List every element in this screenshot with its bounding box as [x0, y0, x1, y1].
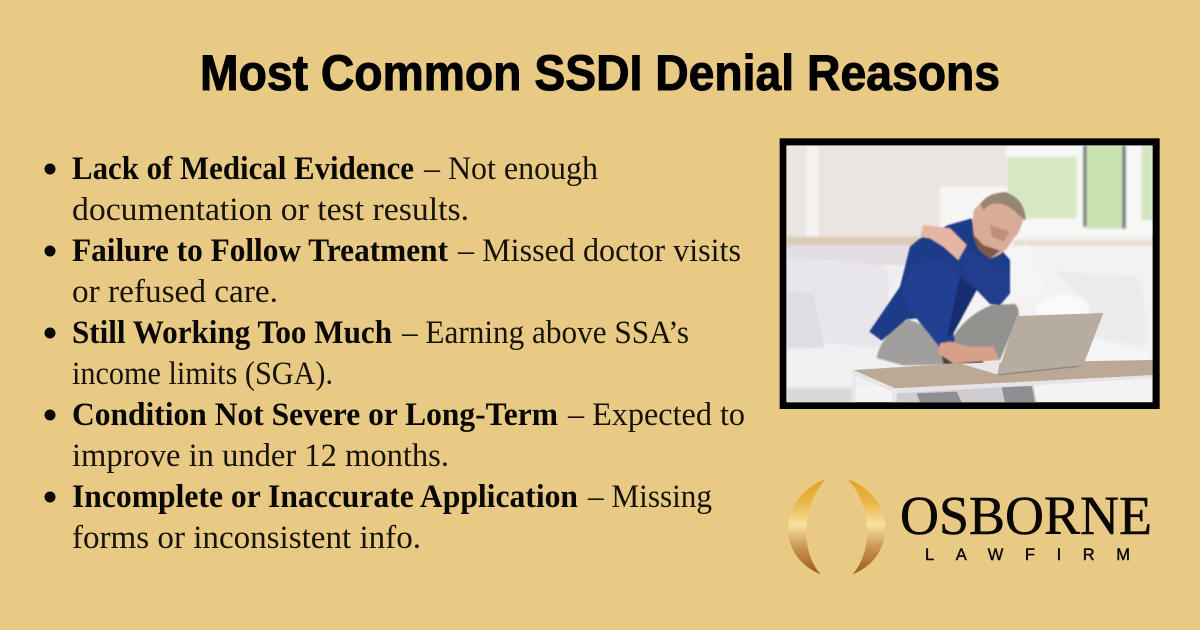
reason 3: still working too much: [44, 315, 689, 392]
photo frame: [780, 138, 1160, 409]
laptop: [997, 313, 1103, 374]
sofa: [1017, 246, 1153, 359]
list of denial reasons: [44, 151, 745, 556]
reason 5: incomplete or inaccurate application: Incomplete or Inaccurate Application: [72, 479, 578, 515]
hand on keyboard: [938, 342, 999, 363]
title: Most Common SSDI Denial Reasons: [200, 45, 1000, 101]
reason 2: failure to follow treatment: Failure to Follow Treatment: [72, 233, 448, 269]
shirt: [869, 218, 1010, 350]
reason 4: condition not severe or long-term: – Expected to: [567, 397, 745, 433]
reason 2: failure to follow treatment: – Missed doctor visits: [457, 233, 741, 269]
trousers: [877, 319, 950, 365]
reason 2: failure to follow treatment: or refused care.: [72, 274, 278, 310]
photo: man with shoulder pain at laptop: [780, 138, 1160, 409]
reason 4: condition not severe or long-term: [44, 397, 745, 474]
reason 1: lack of medical evidence: – Not enough: [423, 151, 598, 187]
reason 1: lack of medical evidence: documentation or test results.: [72, 192, 469, 228]
logo wordmark: OSBORNE: [900, 485, 1152, 546]
window: [1007, 145, 1153, 235]
reason 1: lack of medical evidence: Lack of Medical Evidence: [72, 151, 414, 187]
head: [973, 199, 1024, 258]
reason 3: still working too much: Still Working Too Much: [72, 315, 392, 351]
reason 4: condition not severe or long-term: improve in under 12 months.: [72, 438, 449, 474]
wall: [786, 145, 1006, 237]
reason 3: still working too much: income limits (SGA).: [72, 356, 333, 392]
table: [853, 360, 1153, 388]
reason 2: failure to follow treatment: [44, 233, 741, 310]
logo tagline: LAWFIRM: [925, 546, 1130, 564]
ledge: [786, 237, 920, 245]
reason 5: incomplete or inaccurate application: forms or inconsistent info.: [72, 520, 421, 556]
space beneath table: [897, 384, 1037, 402]
logo mark: gold crescents: [788, 479, 885, 574]
reason 4: condition not severe or long-term: Condition Not Severe or Long-Term: [72, 397, 558, 433]
reason 3: still working too much: – Earning above SSA’s: [401, 315, 689, 351]
logo: Osborne Law Firm: [788, 479, 1152, 574]
reason 5: incomplete or inaccurate application: – Missing: [587, 479, 712, 515]
hand on shoulder: [920, 225, 967, 260]
reason 5: incomplete or inaccurate application: [44, 479, 712, 556]
reason 1: lack of medical evidence: [44, 151, 598, 228]
